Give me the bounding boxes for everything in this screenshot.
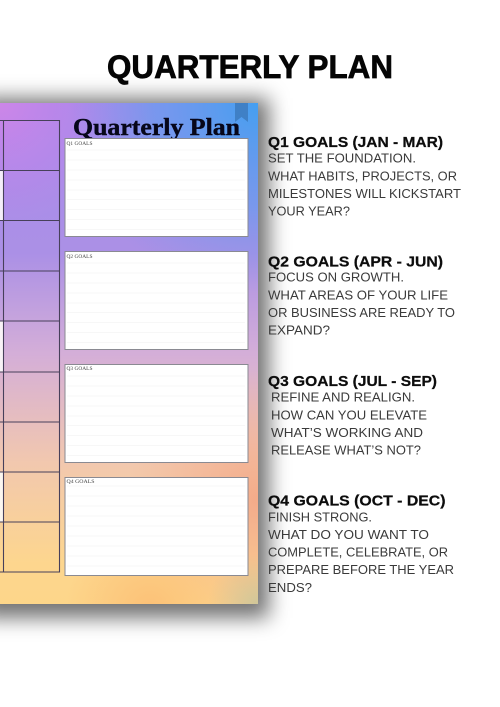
- text block: Q4: ENDS?: [268, 580, 312, 595]
- panel: Q3 goals: [65, 364, 248, 462]
- text block: Q2: WHAT AREAS OF YOUR LIFE: [268, 287, 448, 302]
- text block: Q3: HOW CAN YOU ELEVATE: [271, 407, 427, 422]
- text block: Q1: WHAT HABITS, PROJECTS, OR: [268, 168, 457, 183]
- text block: Q2: FOCUS ON GROWTH.: [268, 270, 404, 285]
- text block: Q2: [268, 254, 455, 338]
- text block: Q1: SET THE FOUNDATION.: [268, 151, 416, 166]
- title: QUARTERLY PLAN: [107, 49, 393, 85]
- label: Q4 goals: Q4 GOALS: [66, 480, 95, 485]
- text block: Q3: RELEASE WHAT’S NOT?: [271, 442, 421, 457]
- text block: Q2: EXPAND?: [268, 322, 330, 338]
- sheet drop shadow: [0, 98, 269, 618]
- text block: Q4: WHAT DO YOU WANT TO: [268, 527, 429, 542]
- text block: Q3: REFINE AND REALIGN.: [271, 390, 415, 405]
- panel: Q2 goals: [65, 252, 248, 350]
- text block: Q3: [268, 373, 437, 457]
- text block: Q4: FINISH STRONG.: [268, 510, 372, 524]
- text block: Q1: [268, 134, 461, 218]
- bookmark icon: [235, 103, 248, 122]
- panel: Q4 goals: [65, 478, 248, 576]
- text block: Q3: WHAT’S WORKING AND: [271, 425, 423, 440]
- heading: Q1: Q1 GOALS (JAN - MAR): [268, 134, 443, 151]
- panel: Q1 goals: [65, 138, 248, 236]
- heading: Q3: Q3 GOALS (JUL - SEP): [268, 373, 437, 390]
- text block: Q2: OR BUSINESS ARE READY TO: [268, 305, 455, 320]
- planner sheet: [0, 103, 258, 604]
- text block: Q1: YOUR YEAR?: [268, 203, 350, 218]
- text block: Q1: MILESTONES WILL KICKSTART: [268, 186, 461, 201]
- text block: Q4: [268, 493, 454, 595]
- label: Q3 goals: Q3 GOALS: [66, 367, 93, 372]
- calendar grid: [0, 120, 60, 572]
- heading: Q4: Q4 GOALS (OCT - DEC): [268, 493, 446, 510]
- label: Q2 goals: Q2 GOALS: [66, 255, 93, 260]
- heading: Q2: Q2 GOALS (APR - JUN): [268, 254, 443, 271]
- sheet heading: Quarterly Plan: [73, 115, 240, 141]
- text block: Q4: COMPLETE, CELEBRATE, OR: [268, 544, 448, 560]
- label: Q1 goals: Q1 GOALS: [66, 142, 93, 147]
- text block: Q4: PREPARE BEFORE THE YEAR: [268, 562, 454, 577]
- sheet gradient background: [0, 103, 258, 604]
